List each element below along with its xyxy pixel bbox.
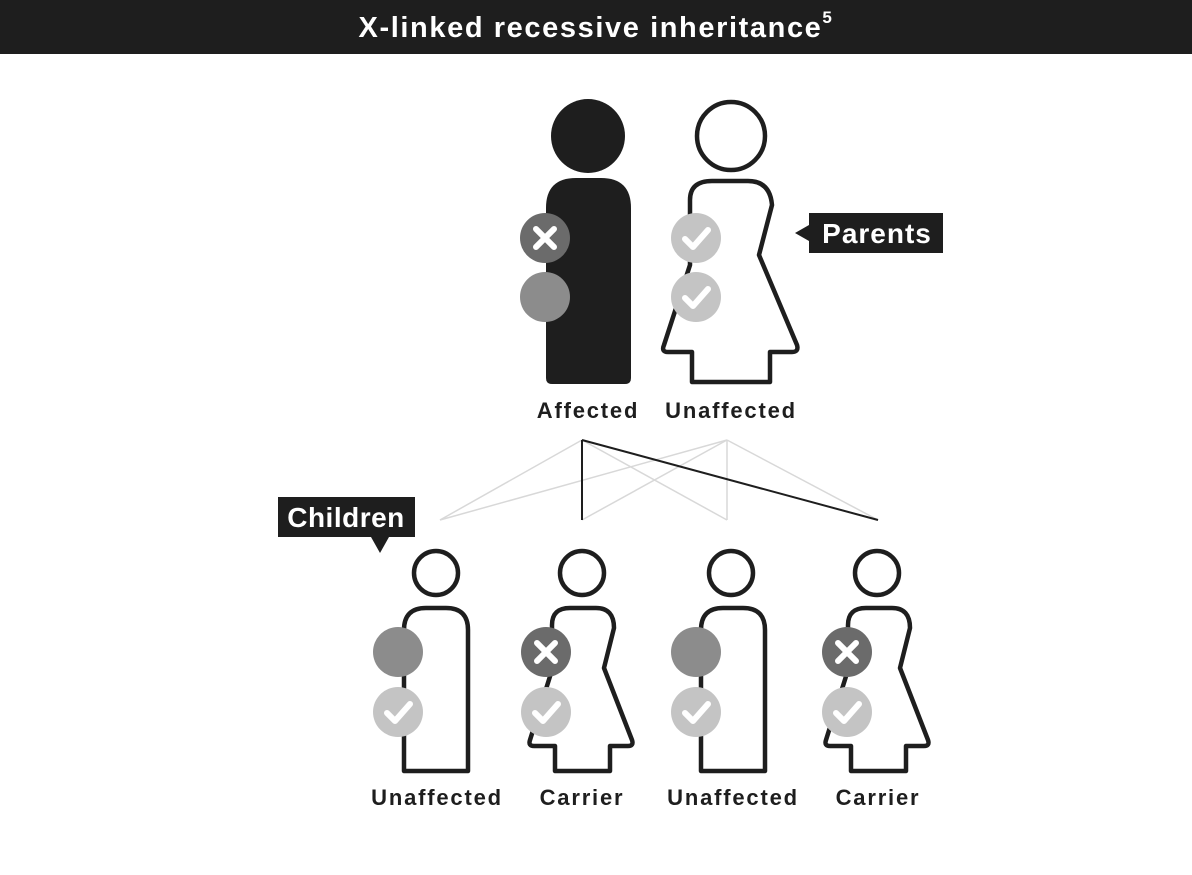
title bar: X-linked recessive inheritance5 — [359, 8, 833, 44]
children labels: Unaffected — [667, 785, 799, 810]
children labels: Carrier — [540, 785, 624, 810]
children labels: Carrier — [836, 785, 920, 810]
father: affected — [520, 99, 631, 384]
parents labels: Affected — [537, 398, 639, 423]
connecting lines — [440, 440, 878, 520]
callout: parents: Parents — [822, 218, 932, 249]
parents labels — [537, 398, 797, 423]
callout: parents — [795, 213, 943, 253]
mother: unaffected — [663, 102, 797, 382]
children labels — [371, 785, 920, 810]
title bar — [0, 0, 1192, 54]
child 1: son unaffected — [373, 551, 468, 771]
child 2: daughter carrier — [521, 551, 632, 771]
callout: children — [278, 497, 415, 553]
callout: children: Children — [287, 502, 405, 533]
children labels: Unaffected — [371, 785, 503, 810]
parents labels: Unaffected — [665, 398, 797, 423]
child 3: son unaffected — [671, 551, 765, 771]
child 4: daughter carrier — [822, 551, 928, 771]
